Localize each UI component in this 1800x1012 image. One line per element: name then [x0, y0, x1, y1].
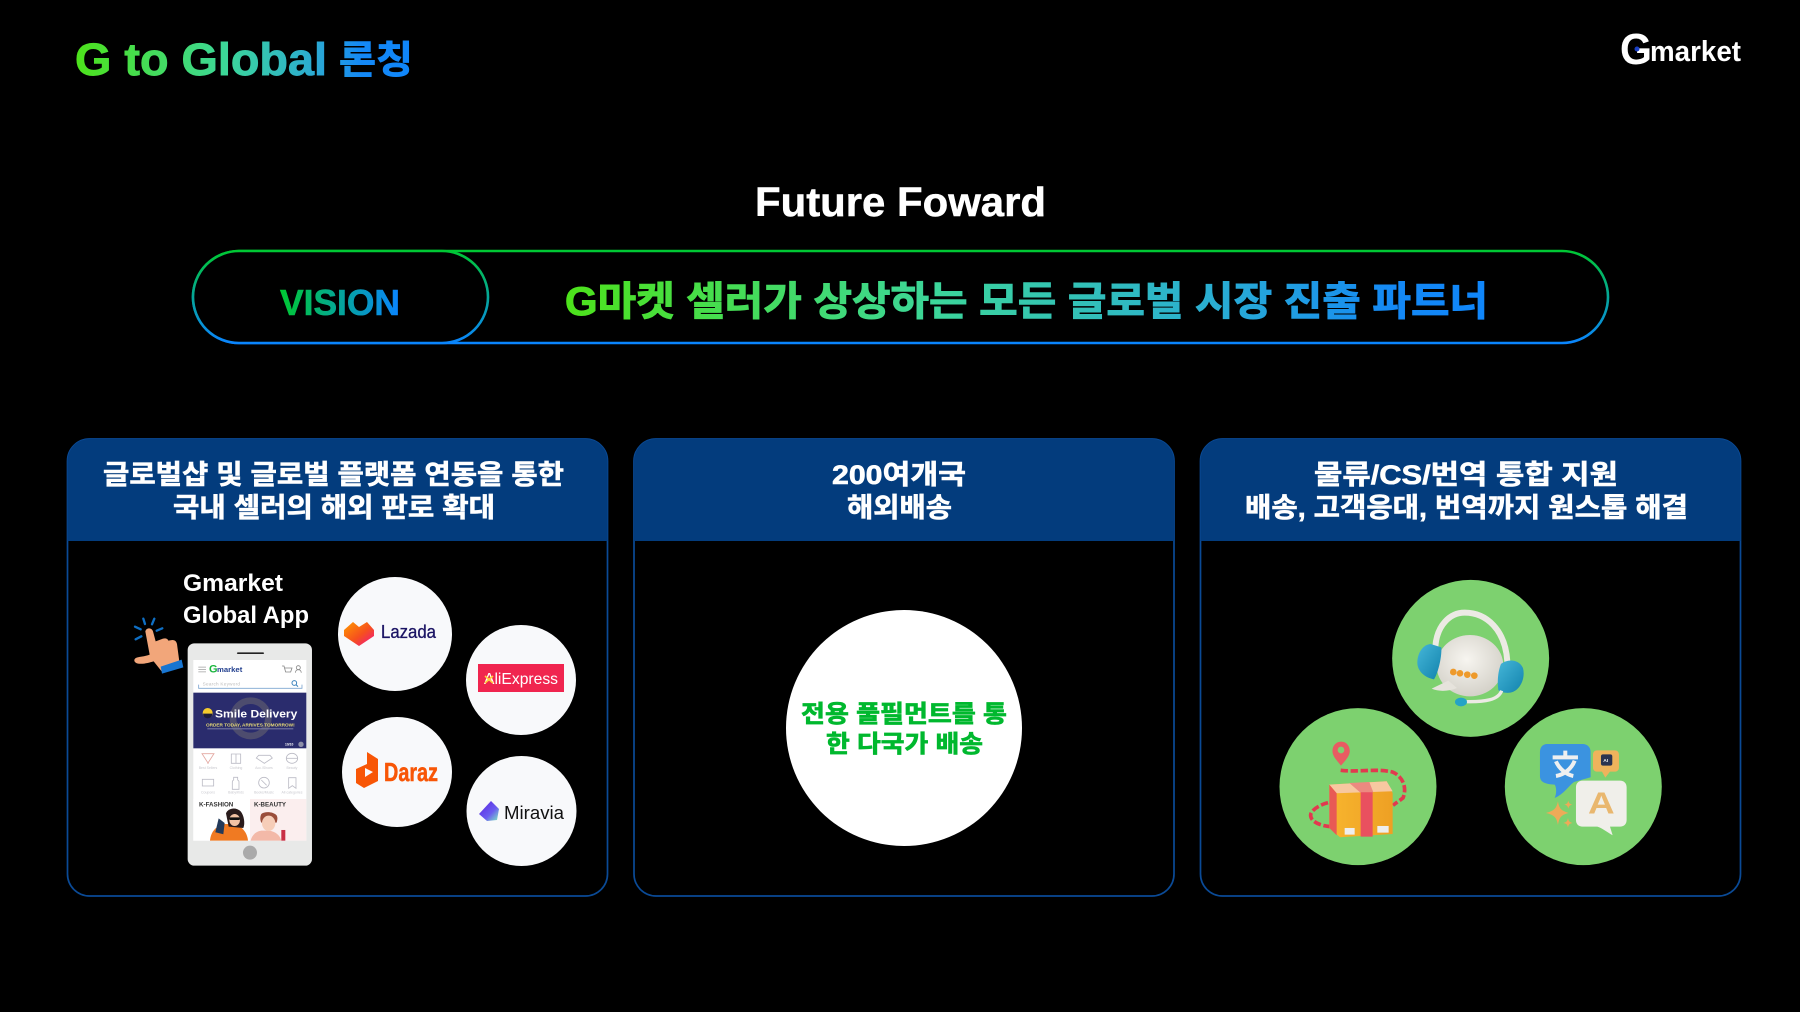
logo: Gmarket: G — [1620, 25, 1652, 74]
panel frame — [1200, 439, 1740, 896]
outer pill — [193, 251, 1608, 343]
circle text — [801, 701, 1007, 758]
title: 론칭 — [339, 40, 413, 82]
panel: global platforms — [68, 439, 608, 896]
phone mockup — [188, 643, 312, 866]
logo: Gmarket — [1620, 25, 1741, 74]
panel: integrated support — [1200, 439, 1740, 896]
icon: tapping hand — [134, 619, 183, 674]
circle: AliExpress: AliExpress — [484, 671, 558, 688]
header text — [832, 460, 966, 523]
icon: parcel route — [1279, 708, 1436, 865]
icon: translation bubbles: AI — [1603, 758, 1609, 764]
circle: Miravia — [466, 756, 576, 866]
circle: Daraz: Daraz — [384, 757, 438, 787]
circle: Lazada — [338, 577, 452, 691]
vision banner — [193, 251, 1608, 343]
vision pill — [193, 251, 488, 343]
circle: Daraz — [342, 717, 452, 827]
panel frame — [634, 439, 1174, 896]
phone mockup: 10/10 — [285, 743, 293, 747]
app label: Global App — [183, 602, 309, 629]
phone mockup: G — [209, 664, 218, 676]
phone mockup: Acc./Shoes — [255, 766, 273, 770]
panel header — [1200, 439, 1740, 541]
app label — [183, 570, 309, 629]
phone mockup: ORDER TODAY, ARRIVES TOMORROW! — [206, 722, 295, 727]
header text: 배송, 고객응대, 번역까지 원스톱 해결 — [1245, 493, 1688, 523]
phone mockup: market — [217, 667, 243, 674]
phone mockup: Beauty — [287, 766, 298, 770]
header text: 물류/CS/번역 통합 지원 — [1314, 460, 1618, 490]
header text: 해외배송 — [847, 493, 952, 523]
circle text: 한 다국가 배송 — [826, 731, 983, 758]
heading: Future Foward: Future Foward — [755, 179, 1046, 225]
panel: worldwide shipping — [634, 439, 1174, 896]
vision label: VISION — [280, 282, 400, 323]
panel frame — [68, 439, 608, 896]
icon: headset support — [1392, 580, 1549, 737]
phone mockup: K-FASHION — [199, 802, 233, 808]
title: G to Global — [75, 34, 327, 85]
header text: 국내 셀러의 해외 판로 확대 — [173, 493, 495, 523]
phone mockup: Search Keyword — [203, 681, 240, 686]
phone mockup: Baby/Kids — [228, 790, 244, 794]
panel header — [634, 439, 1174, 541]
logo: Gmarket: market — [1650, 36, 1741, 68]
vision statement: G마켓 셀러가 상상하는 모든 글로벌 시장 진출 파트너 — [565, 280, 1488, 324]
panel header — [68, 439, 608, 541]
phone mockup: Smile Delivery — [215, 708, 298, 720]
header text: 200여개국 — [832, 460, 966, 490]
phone mockup: Best Sellers — [199, 766, 218, 770]
phone mockup: Clothing — [230, 766, 242, 770]
phone mockup: All categories — [282, 790, 303, 794]
header text: 글로벌샵 및 글로벌 플랫폼 연동을 통한 — [103, 460, 564, 490]
phone mockup: Books/Music — [254, 790, 274, 794]
icon: translation bubbles: A — [1588, 786, 1615, 820]
circle: Miravia: Miravia — [504, 803, 565, 823]
icon: translation bubbles — [1505, 708, 1662, 865]
phone mockup: K-BEAUTY — [254, 802, 286, 808]
header text — [1245, 460, 1688, 523]
circle: Lazada: Lazada — [381, 622, 437, 642]
header text — [103, 460, 564, 523]
white circle — [786, 610, 1022, 846]
circle text: 전용 풀필먼트를 통 — [801, 701, 1007, 728]
phone mockup: Coupons — [201, 790, 215, 794]
circle: AliExpress — [466, 625, 576, 735]
app label: Gmarket — [183, 570, 283, 597]
